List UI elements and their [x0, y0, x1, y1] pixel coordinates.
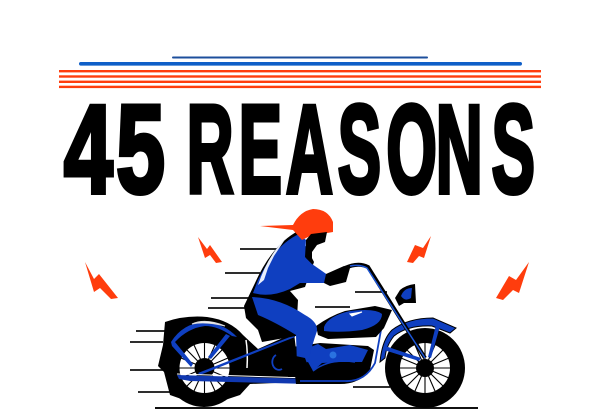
leg [252, 297, 317, 365]
ground line [155, 407, 478, 409]
forks and handlebar [345, 265, 425, 358]
back outline [244, 231, 314, 342]
front fender [380, 318, 456, 362]
frame tubes [198, 335, 295, 375]
rider [244, 209, 350, 377]
boot [288, 355, 312, 377]
face [306, 232, 327, 264]
torso and arm [253, 234, 332, 295]
rear wheel [165, 329, 243, 407]
speed lines [130, 249, 390, 392]
title: 45 [64, 79, 165, 219]
headlight [395, 284, 416, 306]
top rules [59, 56, 541, 88]
icon: lightning bolts [85, 236, 529, 300]
title: REASONS [187, 81, 535, 220]
fuel tank [316, 306, 392, 339]
jacket highlight [258, 238, 286, 285]
hand [324, 266, 350, 286]
engine [292, 343, 374, 384]
white seat area [258, 331, 294, 347]
helmet [260, 209, 333, 240]
front wheel [385, 328, 465, 408]
rear fender blue [171, 322, 237, 367]
motorcycle [158, 209, 465, 408]
rear fender and frame mass [158, 317, 300, 407]
